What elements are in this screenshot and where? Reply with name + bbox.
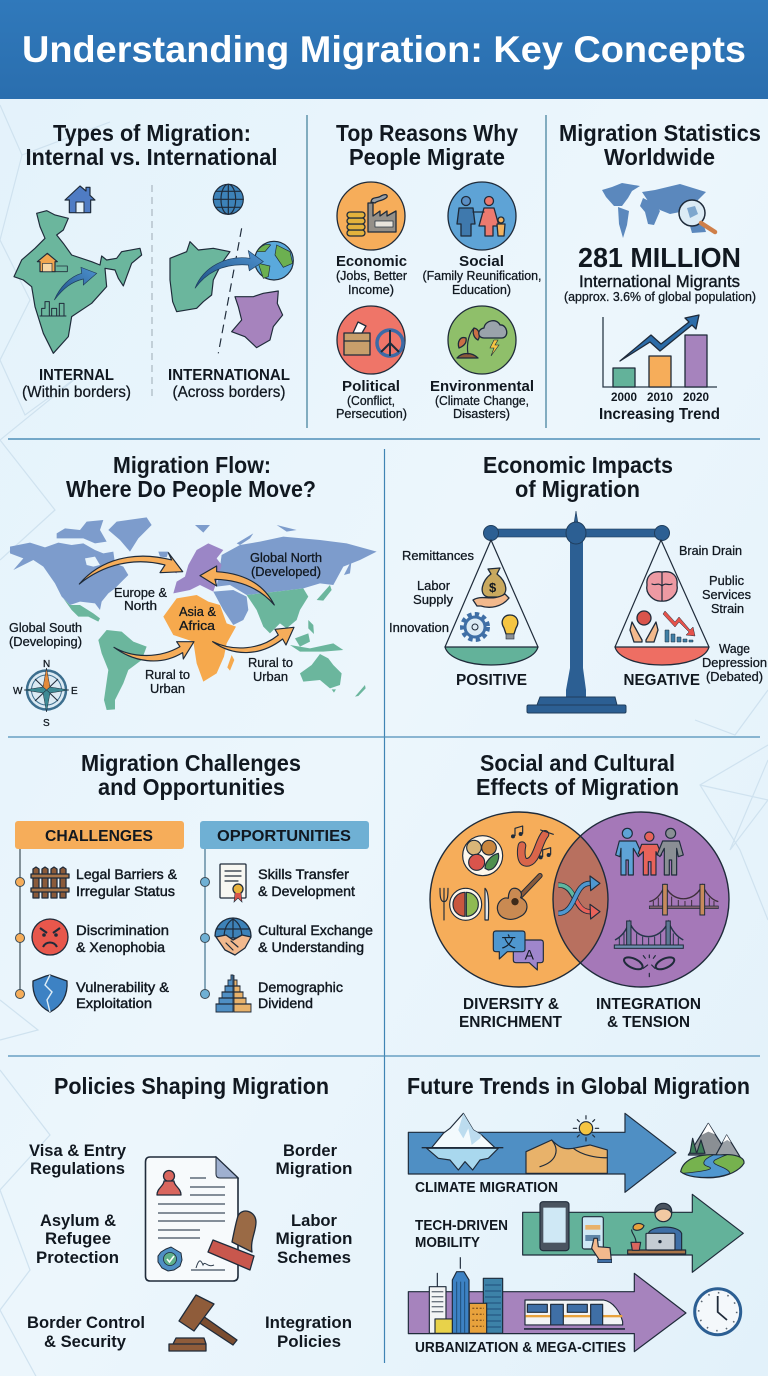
panel: migration statistics — [559, 120, 761, 423]
icons: positive impacts — [463, 568, 518, 639]
label: international — [168, 367, 290, 401]
labels: economic impacts: Services — [702, 588, 751, 602]
label: urbanization: URBANIZATION & MEGA-CITIES — [415, 1340, 626, 1356]
labels: economic impacts: Labor — [417, 579, 450, 593]
label: economic: Income) — [348, 283, 394, 297]
labels: policies left: Border Control — [27, 1313, 145, 1332]
arrow: tech-driven mobility — [523, 1194, 743, 1272]
labels: flow regions: Rural to — [248, 656, 293, 670]
label: economic: (Jobs, Better — [336, 269, 407, 283]
icon: compass: N — [43, 659, 50, 670]
label: internal: INTERNAL — [39, 367, 114, 384]
label: tech-driven mobility — [415, 1218, 508, 1251]
arrow: urbanization — [408, 1258, 686, 1352]
labels: policies left: Regulations — [30, 1159, 125, 1178]
banner: challenges — [15, 821, 184, 849]
heading: challenges and opportunities: Migration Challenges — [81, 750, 301, 776]
labels: flow regions: Urban — [150, 682, 185, 696]
text: skills transfer: & Development — [258, 883, 355, 899]
labels: policies left: Visa & Entry — [29, 1141, 127, 1160]
labels: policies right: Schemes — [277, 1248, 351, 1267]
text: legal barriers: Irregular Status — [76, 883, 175, 899]
text: discrimination — [76, 922, 169, 955]
label: environmental: Disasters) — [453, 407, 510, 421]
labels: flow regions: Europe & — [114, 586, 168, 600]
heading: top reasons — [336, 120, 518, 170]
heading: economic impacts: Economic Impacts — [483, 452, 673, 478]
text: legal barriers: Legal Barriers & — [76, 866, 178, 882]
labels: flow regions: North — [124, 599, 157, 613]
heading: migration flow: Migration Flow: — [113, 452, 271, 478]
panel: policies — [27, 1073, 352, 1351]
statistic: 281 million — [564, 242, 756, 304]
heading: social and cultural: Social and Cultural — [480, 750, 675, 776]
text: legal barriers — [76, 866, 178, 899]
world map — [10, 517, 377, 710]
text: demographic dividend: Demographic — [258, 979, 343, 995]
label: political: Persecution) — [336, 407, 407, 421]
panel: types of migration — [14, 120, 293, 401]
labels: flow regions: Global North — [250, 551, 322, 565]
panel: top reasons — [336, 120, 542, 421]
label: economic — [336, 253, 407, 297]
icon: globe with handshake — [200, 918, 251, 955]
icon: rubber stamp — [208, 1211, 256, 1270]
statistic: 281 million: International Migrants — [579, 272, 740, 291]
text: vulnerability: Vulnerability & — [76, 979, 170, 995]
icons: positive impacts: $ — [489, 580, 497, 595]
labels: policies left: Refugee — [45, 1229, 111, 1248]
heading: statistics: Worldwide — [604, 144, 715, 170]
panel: challenges and opportunities — [15, 750, 373, 1012]
labels: flow regions: Urban — [253, 670, 288, 684]
labels: policies right: Labor — [291, 1211, 337, 1230]
icon: angry face — [16, 919, 68, 955]
text: cultural exchange — [258, 922, 373, 955]
icon: guitar — [497, 876, 540, 919]
label: internal: (Within borders) — [22, 384, 131, 401]
arrow: South America to Africa — [114, 642, 194, 661]
heading: future trends: Future Trends in Global Migration — [407, 1073, 750, 1099]
labels: policies left: & Security — [44, 1332, 127, 1351]
statistic: 281 million: (approx. 3.6% of global population) — [564, 290, 756, 304]
label: political: Political — [342, 378, 400, 395]
labels: flow regions: Africa — [179, 619, 215, 633]
text: skills transfer — [258, 866, 355, 899]
map: international migration across borders — [170, 228, 293, 353]
icon: world map with magnifier — [602, 183, 715, 238]
header banner — [0, 0, 768, 99]
icon: second bridge — [614, 921, 683, 948]
heading: migration flow: Where Do People Move? — [66, 476, 316, 502]
heading: top reasons: People Migrate — [349, 144, 505, 170]
labels: economic impacts: Remittances — [402, 549, 474, 563]
heading: social and cultural — [476, 750, 679, 800]
icon: broken chain — [622, 955, 676, 977]
title: Understanding Migration: Key Concepts — [22, 29, 746, 70]
bar chart: increasing trend — [599, 315, 720, 423]
icon: crossing arrows — [558, 876, 600, 919]
arrow: Asia to Europe — [200, 566, 274, 605]
label: political: (Conflict, — [347, 394, 395, 408]
heading: policies: Policies Shaping Migration — [54, 1073, 329, 1099]
text: cultural exchange: Cultural Exchange — [258, 922, 373, 938]
icon: people holding hands — [616, 828, 683, 875]
labels: policies right: Border — [283, 1141, 337, 1160]
icon: translation bubbles: A — [525, 946, 535, 962]
labels: flow regions: Rural to — [145, 668, 190, 682]
banner: opportunities — [200, 821, 369, 849]
labels: economic impacts: Public — [709, 574, 744, 588]
heading: statistics — [559, 120, 761, 170]
icons: negative impacts — [630, 572, 695, 642]
heading: economic impacts: of Migration — [515, 476, 640, 502]
panel: migration flow — [9, 452, 377, 729]
icon: gavel — [169, 1295, 237, 1351]
labels: economic impacts: Supply — [413, 593, 454, 607]
icon: saxophone and notes — [511, 826, 553, 862]
heading: types of migration: Types of Migration: — [53, 120, 251, 146]
bar chart: increasing trend: Increasing Trend — [599, 406, 720, 423]
heading: types of migration: Internal vs. International — [26, 144, 278, 170]
label: environmental: Environmental — [430, 378, 534, 395]
text: demographic dividend: Dividend — [258, 995, 313, 1011]
icon: translation bubbles: 文 — [501, 934, 516, 951]
labels: diversity and integration: & TENSION — [607, 1014, 690, 1031]
text: demographic dividend — [258, 979, 343, 1011]
icon: environmental — [448, 306, 516, 374]
heading: top reasons: Top Reasons Why — [336, 120, 518, 146]
labels: policies right: Policies — [277, 1332, 341, 1351]
icon: social — [448, 182, 516, 250]
heading: social and cultural: Effects of Migration — [476, 774, 679, 800]
labels: flow regions: (Developed) — [251, 565, 321, 579]
bar chart: increasing trend: 2020 — [683, 390, 709, 404]
text: skills transfer: Skills Transfer — [258, 866, 349, 882]
icon: fence — [16, 867, 69, 898]
labels: policies left: Protection — [36, 1248, 119, 1267]
label: social — [422, 253, 542, 297]
labels: economic impacts: NEGATIVE — [624, 672, 700, 689]
banner: opportunities: OPPORTUNITIES — [217, 828, 351, 845]
icon: certificate — [200, 864, 246, 902]
map: internal migration within India — [14, 211, 142, 353]
icon: compass: E — [71, 686, 78, 697]
heading: types of migration — [26, 120, 278, 170]
labels: policies right: Migration — [276, 1159, 352, 1178]
icon: compass — [13, 659, 78, 729]
labels: diversity and integration — [459, 996, 701, 1031]
icon: clock — [695, 1289, 741, 1335]
heading: challenges and opportunities: and Opportunities — [98, 774, 285, 800]
arrow: Americas to Europe — [79, 553, 183, 584]
heading: economic impacts — [483, 452, 673, 502]
icon: bridge — [649, 884, 718, 915]
label: economic: Economic — [336, 253, 407, 270]
labels: economic impacts: POSITIVE — [456, 672, 527, 689]
label: social: Education) — [452, 283, 511, 297]
label: environmental: (Climate Change, — [435, 394, 529, 408]
heading: migration flow — [66, 452, 316, 502]
labels: economic impacts: Innovation — [389, 621, 449, 635]
arrow: climate migration — [408, 1113, 676, 1192]
icon: compass: S — [43, 718, 50, 729]
balance scale — [445, 511, 709, 713]
label: tech-driven mobility: MOBILITY — [415, 1235, 480, 1251]
labels: economic impacts: (Debated) — [706, 670, 763, 684]
labels: policies right: Integration — [265, 1313, 352, 1332]
icon: mountain landscape — [681, 1123, 744, 1178]
labels: policies left: Asylum & — [40, 1211, 116, 1230]
icon: house — [65, 186, 95, 213]
labels: policies right — [265, 1141, 352, 1351]
labels: diversity and integration: ENRICHMENT — [459, 1014, 562, 1031]
labels: economic impacts: Brain Drain — [679, 544, 742, 558]
labels: flow regions: Global South — [9, 621, 82, 635]
arrow: Africa to Asia — [213, 627, 294, 653]
icon: political — [337, 306, 405, 374]
heading: statistics: Migration Statistics — [559, 120, 761, 146]
labels: diversity and integration: DIVERSITY & — [463, 996, 559, 1013]
statistic: 281 million: 281 MILLION — [578, 242, 741, 273]
labels: flow regions: (Developing) — [9, 635, 82, 649]
panel: future trends — [407, 1073, 750, 1356]
label: political — [336, 378, 407, 421]
labels: policies right: Migration — [276, 1229, 352, 1248]
venn diagram — [430, 812, 729, 987]
icon: economic — [337, 182, 405, 250]
label: environmental — [430, 378, 534, 421]
bar chart: increasing trend: 2010 — [647, 390, 673, 404]
icon: broken shield — [16, 975, 67, 1012]
label: climate migration: CLIMATE MIGRATION — [415, 1180, 558, 1196]
labels: economic impacts: Strain — [711, 602, 744, 616]
text: cultural exchange: & Understanding — [258, 939, 364, 955]
text: vulnerability: Exploitation — [76, 995, 152, 1011]
panel: social and cultural effects — [430, 750, 729, 1031]
panel: economic impacts — [389, 452, 767, 713]
label: internal — [22, 367, 131, 401]
labels: flow regions — [9, 551, 322, 696]
labels: economic impacts: Depression — [702, 656, 767, 670]
labels: economic impacts — [389, 544, 767, 689]
bar chart: increasing trend: 2000 — [611, 390, 637, 404]
text: discrimination: & Xenophobia — [76, 939, 165, 955]
label: international: (Across borders) — [172, 384, 286, 401]
banner: challenges: CHALLENGES — [45, 828, 153, 845]
labels: policies left — [27, 1141, 145, 1351]
heading: challenges and opportunities — [81, 750, 301, 800]
label: international: INTERNATIONAL — [168, 367, 290, 384]
labels: economic impacts: Wage — [719, 642, 750, 656]
icon: globe — [213, 184, 243, 214]
labels: flow regions: Asia & — [179, 605, 217, 619]
label: social: Social — [459, 253, 504, 270]
labels: diversity and integration: INTEGRATION — [596, 996, 701, 1013]
icon: translation bubbles — [493, 931, 543, 970]
icon: policy document — [146, 1157, 238, 1281]
icon: food plate — [463, 836, 503, 876]
icon: population pyramid — [200, 975, 251, 1012]
icon: meal with cutlery — [440, 888, 489, 920]
text: discrimination: Discrimination — [76, 922, 169, 938]
text: vulnerability — [76, 979, 170, 1011]
label: tech-driven mobility: TECH-DRIVEN — [415, 1218, 508, 1234]
label: social: (Family Reunification, — [422, 269, 542, 283]
icon: compass: W — [13, 686, 23, 697]
